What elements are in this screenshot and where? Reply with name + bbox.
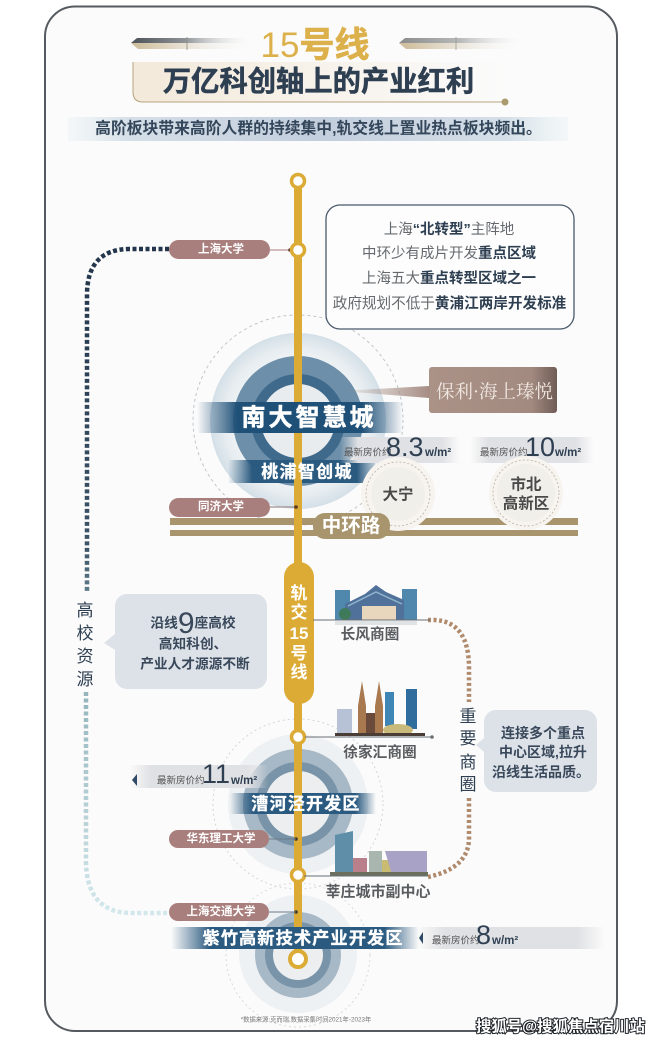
info box: 北转型: 上海“北转型”主阵地 xyxy=(384,221,514,238)
callout: 沿线9座高校: 沿线9座高校 xyxy=(150,606,236,640)
info box: 北转型: 中环少有成片开发重点区域 xyxy=(362,244,536,262)
station: 莘庄 xyxy=(292,868,304,882)
price: 紫竹 8: 8 xyxy=(476,920,491,950)
footnote: data source: *数据来源:克而瑞,数据采集时间2021年-2023年 xyxy=(241,1014,371,1024)
pill: 上海交通大学: 上海交通大学 xyxy=(186,904,256,918)
illustration: 莘庄城市副中心 buildings xyxy=(304,831,428,876)
callout: 连接多个重点: 连接多个重点 xyxy=(501,725,585,741)
bubble: 市北高新区: 市北 xyxy=(510,474,542,494)
icon: left train xyxy=(131,37,250,50)
label: 高校资源: 源 xyxy=(76,670,94,688)
subtitle band: 高阶板块带来高阶人群的持续集中,轨交线上置业热点板块频出。 xyxy=(95,118,542,138)
price: 紫竹 8: w/m² xyxy=(491,935,518,947)
heading: 万亿科创轴上的产业红利 xyxy=(133,62,508,106)
price: 漕河泾 11: w/m² xyxy=(230,775,257,787)
label: 徐家汇商圈: 徐家汇商圈 xyxy=(343,743,417,761)
band: 南大智慧城: 南大智慧城 xyxy=(242,404,376,432)
label: 高校资源: 资 xyxy=(76,646,94,666)
callout: 沿线9座高校: 高知科创、 xyxy=(159,636,227,652)
price: 漕河泾 11 xyxy=(130,759,268,789)
pill: 轨交15号线: 号 xyxy=(290,644,308,662)
bubble: 市北高新区 xyxy=(489,456,563,530)
pill: 轨交15号线: 轨 xyxy=(290,582,308,602)
circles: 漕河泾 xyxy=(213,719,383,889)
label: 重要商圈: 商 xyxy=(460,752,476,772)
callout: 保利·海上瑧悦: 保利·海上瑧悦 xyxy=(436,378,553,404)
metro line 15 xyxy=(294,181,302,958)
station: top terminal xyxy=(292,174,304,188)
callout: 沿线9座高校: 产业人才源源不断 xyxy=(140,656,250,672)
callout: 保利·海上瑧悦 xyxy=(340,367,557,413)
dotted line: university resources xyxy=(86,249,169,913)
info box: 北转型 xyxy=(326,205,574,329)
icon: right train xyxy=(399,37,521,50)
pill: 上海大学 xyxy=(169,240,294,259)
label: 莘庄城市副中心: 莘庄城市副中心 xyxy=(325,882,431,900)
info box: 北转型: 政府规划不低于黄浦江两岸开发标准 xyxy=(333,294,567,312)
station: 上海大学 xyxy=(292,244,304,256)
heading: 万亿科创轴上的产业红利: 万亿科创轴上的产业红利 xyxy=(163,65,474,97)
label: 高校资源: 校 xyxy=(76,624,94,642)
label: 中环路: 中环路 xyxy=(322,515,381,537)
circles: 南大智慧城 xyxy=(193,315,403,525)
pill: 华东理工大学: 华东理工大学 xyxy=(186,831,256,845)
label: 重要商圈: 重 xyxy=(460,706,476,726)
info box: 北转型: 上海五大重点转型区域之一 xyxy=(362,269,536,287)
band: 南大智慧城 xyxy=(197,402,403,433)
pill: 上海交通大学 xyxy=(169,903,298,921)
bubble: 大宁: 大宁 xyxy=(382,484,414,504)
price: 大宁 8.3: w/m² xyxy=(424,447,451,459)
circles: 紫竹 xyxy=(226,883,370,1027)
label: 桃浦智创城: 桃浦智创城 xyxy=(261,462,353,482)
price: 大宁 8.3: 最新房价约 xyxy=(344,446,392,458)
ring road: 中环路 rails xyxy=(170,518,578,536)
dotted line: commercial districts xyxy=(428,620,469,877)
pill: 同济大学: 同济大学 xyxy=(198,499,244,513)
price: 大宁 8.3: 8.3 xyxy=(386,432,424,462)
callout: 连接多个重点 xyxy=(476,710,597,792)
band: 桃浦智创城 xyxy=(228,460,378,483)
pill: 上海大学: 上海大学 xyxy=(198,242,244,256)
price: 市北 10 xyxy=(470,432,594,469)
callout: 连接多个重点: 沿线生活品质。 xyxy=(492,764,590,780)
price: 紫竹 8 xyxy=(417,920,605,950)
price: 漕河泾 11: 11 xyxy=(202,759,230,789)
callout: 连接多个重点: 中心区域,拉升 xyxy=(499,744,587,760)
watermark: 搜狐号@搜狐焦点宿川站 xyxy=(476,1016,645,1036)
pill: 轨交15号线 xyxy=(284,562,314,704)
pill: 华东理工大学 xyxy=(169,830,298,848)
illustration: 徐家汇商圈 buildings xyxy=(305,681,434,739)
title: 15号线: 15号线 xyxy=(261,26,369,64)
bubble: 大宁 xyxy=(361,457,435,531)
price: 市北 10: 10 xyxy=(525,432,555,462)
pill: 轨交15号线: 线 xyxy=(290,662,308,682)
price: 大宁 8.3 xyxy=(340,432,460,469)
label: 重要商圈: 圈 xyxy=(460,774,476,794)
band: 漕河泾 xyxy=(230,793,376,814)
pill: 同济大学 xyxy=(169,498,298,517)
label: 漕河泾开发区: 漕河泾开发区 xyxy=(251,794,361,814)
bubble: 市北高新区: 高新区 xyxy=(503,494,549,512)
subtitle band xyxy=(68,117,568,141)
price: 市北 10: 最新房价约 xyxy=(480,446,528,458)
price: 市北 10: w/m² xyxy=(554,447,581,459)
pill: 轨交15号线: 15 xyxy=(290,624,308,642)
price: 紫竹 8: 最新房价约 xyxy=(432,934,480,946)
callout: 沿线9座高校 xyxy=(104,594,267,689)
pill: 轨交15号线: 交 xyxy=(290,602,308,622)
label: 重要商圈: 要 xyxy=(460,728,476,748)
label: 长风商圈: 长风商圈 xyxy=(341,625,399,643)
label: 中环路 xyxy=(313,513,390,539)
station: 徐家汇 xyxy=(292,730,304,744)
station: bottom terminal xyxy=(290,951,306,967)
label: 高校资源: 高 xyxy=(76,600,94,620)
illustration: 长风商圈 buildings xyxy=(313,585,430,625)
band: 紫竹高新技术产业开发区: 紫竹高新技术产业开发区 xyxy=(202,928,404,948)
price: 漕河泾 11: 最新房价约 xyxy=(157,774,205,786)
